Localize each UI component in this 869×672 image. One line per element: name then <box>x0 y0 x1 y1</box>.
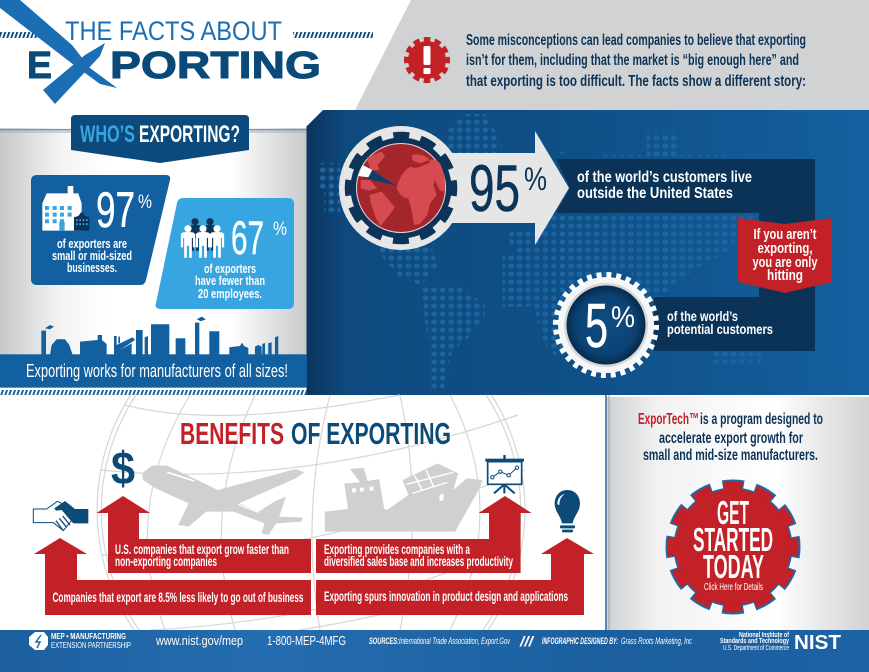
panel: world customers <box>307 110 869 395</box>
arrow: grow faster: U.S. companies that export grow faster than <box>115 542 289 557</box>
icon: handshake <box>33 501 88 531</box>
icon: white gear 5% <box>556 275 656 375</box>
title hatch left <box>0 32 40 38</box>
title E: E <box>27 45 52 87</box>
callout: red ribbon: you are only <box>752 255 818 271</box>
button: get started gear: STARTED <box>693 521 773 558</box>
title big X <box>0 0 117 104</box>
arrow: companies less likely <box>34 538 311 615</box>
phone: 1-800-MEP-4MFG <box>267 633 346 648</box>
arrow: grow faster: non-exporting companies <box>115 554 217 569</box>
NIST attribution: Standards and Technology <box>720 638 789 645</box>
MEP name <box>51 632 131 650</box>
arrow: innovation: Exporting spurs innovation in product design and applications <box>324 589 568 604</box>
icon: white gear 5%: 5 <box>585 292 608 361</box>
title PORTING: PORTING <box>110 45 321 87</box>
text: outside customers <box>577 169 752 202</box>
stat card 67% <box>156 198 294 309</box>
icon: dollar: $ <box>111 442 135 494</box>
panel: exportech <box>605 395 869 630</box>
program text <box>638 411 823 464</box>
button: get started gear: TODAY <box>703 548 764 585</box>
sources: SOURCES: <box>369 636 399 647</box>
MEP name: EXTENSION PARTNERSHIP <box>51 641 131 650</box>
icon: light bulb <box>555 490 580 532</box>
icon: cargo ship <box>325 463 482 532</box>
NIST attribution <box>720 632 790 652</box>
arrow: companies less likely: Companies that export are 8.5% less likely to go out of business <box>52 590 304 605</box>
designed by: INFOGRAPHIC DESIGNED BY: <box>542 636 618 647</box>
text: potential customers: potential customers <box>667 321 773 337</box>
stat card 67%: of exporters <box>204 261 256 276</box>
heading <box>180 416 451 451</box>
stat card 97%: small or mid-sized <box>52 248 132 263</box>
designed by: Grass Roots Marketing, Inc <box>621 636 692 647</box>
button: get started gear: Click Here for Details <box>704 582 763 593</box>
panel: benefits of exporting <box>33 395 594 630</box>
stat card 97%: % <box>138 192 152 213</box>
button: get started gear: GET <box>717 494 749 531</box>
skyline caption: Exporting works for manufacturers of all sizes! <box>26 360 288 381</box>
arrow: diversified sales: diversified sales base and increases productivity <box>324 554 513 569</box>
callout: red ribbon <box>738 218 832 293</box>
stat card 67%: have fewer than <box>195 273 265 288</box>
icon: white gear 5%: % <box>611 301 635 334</box>
arrow: diversified sales: Exporting provides companies with a <box>324 542 470 557</box>
text: outside customers: of the world’s customers live <box>577 169 752 186</box>
icon: airplane <box>142 466 304 535</box>
icon: people <box>181 218 224 258</box>
stat card 97%: of exporters are <box>57 236 127 251</box>
footer <box>0 630 869 672</box>
arrow: grow faster <box>96 496 311 573</box>
NIST attribution: National Institute of <box>739 632 790 639</box>
panel: who's exporting <box>0 115 308 395</box>
stat card 67%: % <box>273 219 287 240</box>
heading banner <box>71 115 249 163</box>
NIST attribution: U.S. Department of Commerce <box>723 645 789 652</box>
dotted world map <box>317 114 761 388</box>
arrow 95% <box>440 131 815 351</box>
arrow: innovation <box>316 538 594 615</box>
divider slashes: /// <box>519 633 535 649</box>
icon: MEP logo <box>29 632 48 650</box>
top header grey panel <box>355 0 869 110</box>
program text: ExporTech™ <box>638 411 699 428</box>
button: get started gear <box>671 485 795 609</box>
sources: International Trade Association, Export.Gov <box>399 636 511 647</box>
text: potential customers <box>667 308 773 337</box>
sources <box>369 636 511 647</box>
title hatch right <box>293 32 373 38</box>
text: outside customers: outside the United States <box>577 185 733 202</box>
heading: BENEFITS <box>180 416 284 451</box>
stat card 67%: 20 employees. <box>198 286 262 301</box>
MEP name: MEP • MANUFACTURING <box>51 632 126 641</box>
website: www.nist.gov/mep <box>155 633 243 648</box>
wedge <box>358 165 396 186</box>
icon: buildings <box>42 186 89 231</box>
callout: red ribbon: If you aren’t <box>754 227 817 243</box>
globe background <box>97 395 525 630</box>
stat 95%: 95 <box>469 151 520 225</box>
stat card 67%: 67 <box>231 211 264 264</box>
callout: red ribbon: exporting, <box>758 241 812 257</box>
arrow: diversified sales <box>316 496 532 573</box>
title line 1: THE FACTS ABOUT <box>65 16 282 46</box>
title <box>0 0 373 104</box>
hatch strip <box>0 390 307 395</box>
stat card 97%: businesses. <box>67 260 117 275</box>
callout: red ribbon: hitting <box>767 268 803 284</box>
text: potential customers: of the world’s <box>667 308 738 324</box>
NIST logo: NIST <box>794 632 841 654</box>
icon: presentation chart <box>485 455 524 493</box>
program text: accelerate export growth for <box>659 430 803 447</box>
icon: red exclamation gear <box>406 40 448 80</box>
heading banner: WHO’S <box>80 121 135 148</box>
heading banner: EXPORTING? <box>139 121 240 148</box>
icon: gear with globe <box>339 126 463 250</box>
intro text <box>466 32 806 90</box>
stat card 97% <box>31 175 170 285</box>
stat card 97%: 97 <box>96 182 135 238</box>
icon: factory skyline <box>0 317 307 388</box>
heading: OF EXPORTING <box>291 416 451 451</box>
stat 95%: % <box>524 161 547 197</box>
